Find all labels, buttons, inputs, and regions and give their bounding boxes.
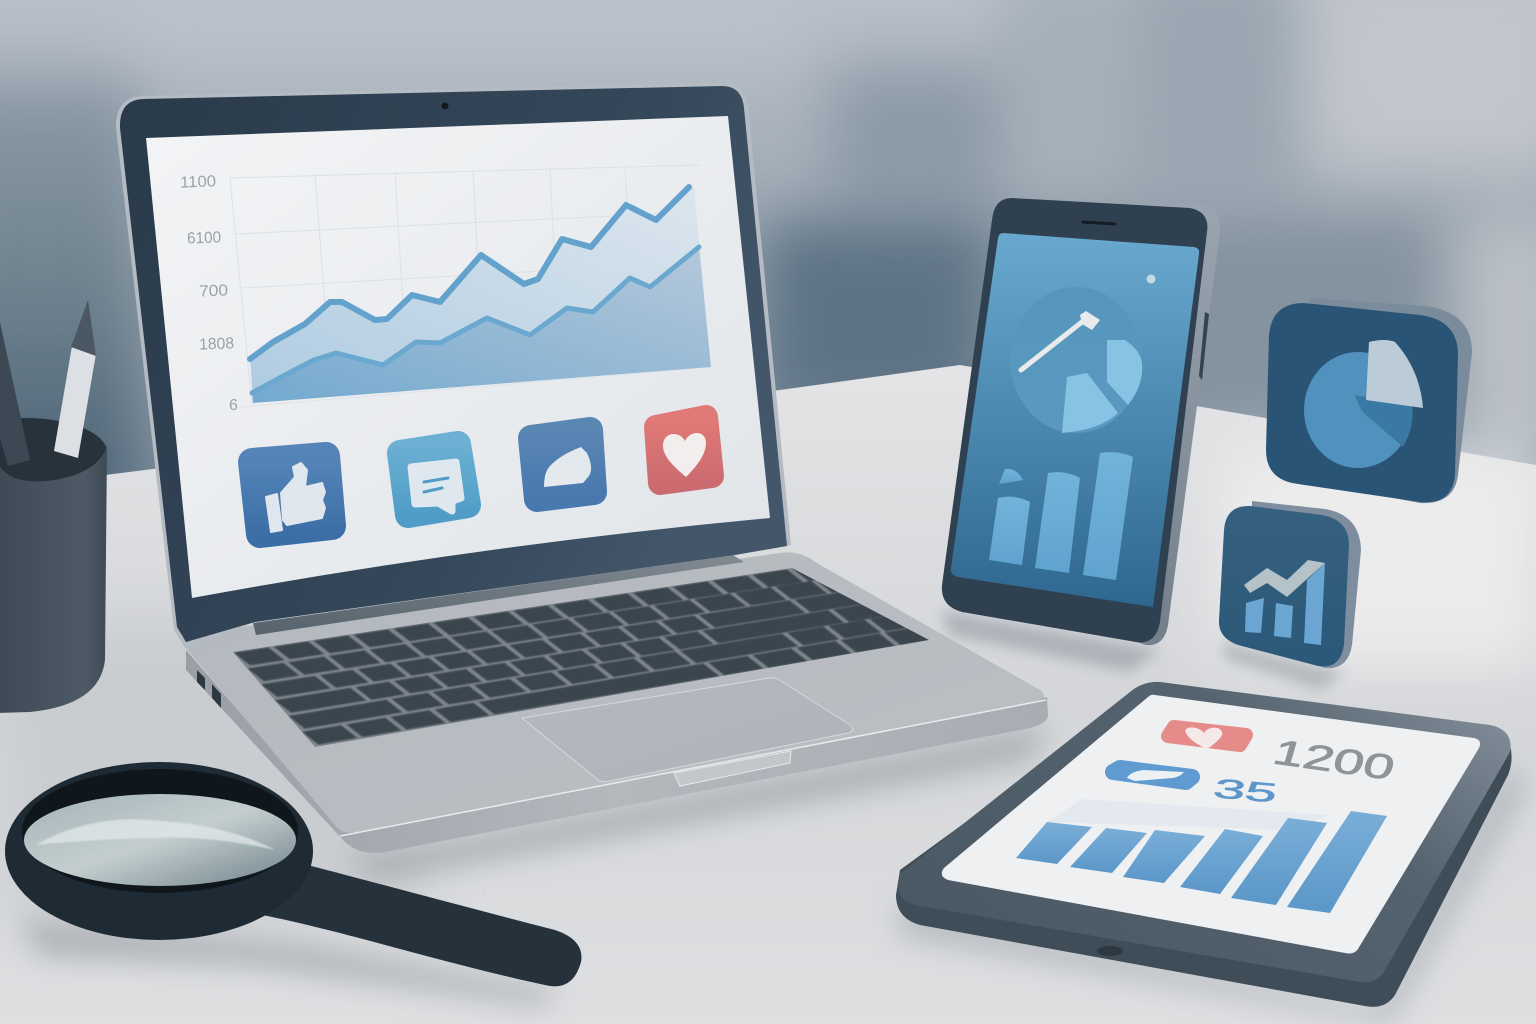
icon block side bbox=[1250, 501, 1361, 668]
phone pie chart bbox=[1010, 287, 1142, 433]
icon block face bbox=[1219, 506, 1349, 667]
lens bbox=[24, 794, 296, 886]
tablet screen bbox=[942, 695, 1480, 954]
tablet bbox=[896, 682, 1512, 1007]
magnifying glass bbox=[5, 762, 581, 986]
icon: white pen bbox=[54, 300, 96, 458]
deck highlight bbox=[340, 700, 1046, 836]
y axis labels: 1808 bbox=[199, 335, 234, 354]
metric: 1200: 1200 bbox=[1269, 733, 1399, 787]
laptop lid and bezel bbox=[116, 82, 791, 648]
lower series line bbox=[252, 247, 699, 393]
phone bar chart bbox=[989, 452, 1133, 580]
device shadows bbox=[20, 610, 1524, 1024]
line chart grid bbox=[230, 165, 712, 407]
pie slice bbox=[1107, 340, 1142, 405]
faint chart band bbox=[1047, 799, 1330, 830]
cup body bbox=[0, 445, 107, 713]
phone bbox=[942, 198, 1220, 645]
tablet body bbox=[896, 690, 1512, 1007]
ring bbox=[5, 762, 313, 940]
side button bbox=[1199, 312, 1209, 380]
side ports bbox=[197, 670, 221, 708]
icon: heart bbox=[656, 417, 712, 483]
speaker bbox=[1083, 222, 1115, 224]
phone side bbox=[1010, 198, 1220, 645]
phone status dot bbox=[1146, 274, 1156, 284]
phone body bbox=[942, 198, 1207, 642]
area chart bbox=[250, 187, 711, 403]
y axis labels: 700 bbox=[199, 282, 228, 300]
upper series line bbox=[250, 187, 689, 359]
upper series area bbox=[250, 187, 711, 403]
metric: 35: 35 bbox=[1211, 774, 1280, 808]
icon: comment bbox=[400, 444, 468, 515]
webcam bbox=[442, 102, 448, 110]
charging port bbox=[1097, 946, 1123, 956]
trend line bbox=[1244, 560, 1325, 597]
pie needle bbox=[1021, 318, 1087, 370]
icon block face bbox=[1266, 303, 1458, 502]
icon block side bbox=[1300, 298, 1472, 503]
pie shaded wedge bbox=[1355, 395, 1413, 447]
front notch bbox=[674, 751, 791, 786]
line and bar chart app icon bbox=[1219, 501, 1361, 668]
heart badge bbox=[1168, 727, 1246, 749]
keyboard bbox=[233, 568, 958, 747]
bars bbox=[1245, 563, 1325, 645]
y axis labels: 6100 bbox=[187, 229, 221, 248]
tablet bar chart bbox=[1016, 811, 1387, 913]
phone screen bbox=[951, 233, 1199, 607]
laptop base edge bbox=[186, 650, 1048, 853]
laptop bbox=[116, 82, 1048, 853]
y axis labels: 1100 bbox=[180, 173, 216, 192]
handle bbox=[262, 858, 581, 986]
keyboard well bbox=[233, 568, 929, 747]
icon: share bbox=[531, 430, 594, 499]
hinge strip bbox=[253, 555, 744, 635]
pie slice bbox=[1062, 373, 1118, 433]
pie base bbox=[1304, 352, 1412, 468]
y axis labels: 6 bbox=[229, 397, 238, 414]
tablet front face bbox=[898, 682, 1511, 982]
ring inner shadow bbox=[22, 769, 298, 893]
lower series area bbox=[252, 247, 711, 403]
pie chart app icon bbox=[1266, 298, 1472, 503]
cup interior bbox=[0, 418, 107, 486]
blurred room background bbox=[0, 0, 1536, 520]
laptop deck bbox=[185, 552, 1044, 833]
pie highlight slice bbox=[1366, 340, 1423, 408]
y axis labels bbox=[180, 173, 238, 414]
blue badge bbox=[1113, 768, 1192, 782]
trackpad bbox=[522, 678, 853, 782]
pen holder with pens bbox=[0, 300, 107, 713]
laptop screen bbox=[146, 116, 770, 598]
lens reflection bbox=[35, 819, 275, 850]
icon: dark pen bbox=[0, 322, 30, 466]
desk surface bbox=[0, 365, 1536, 1024]
icon: like bbox=[252, 456, 332, 534]
